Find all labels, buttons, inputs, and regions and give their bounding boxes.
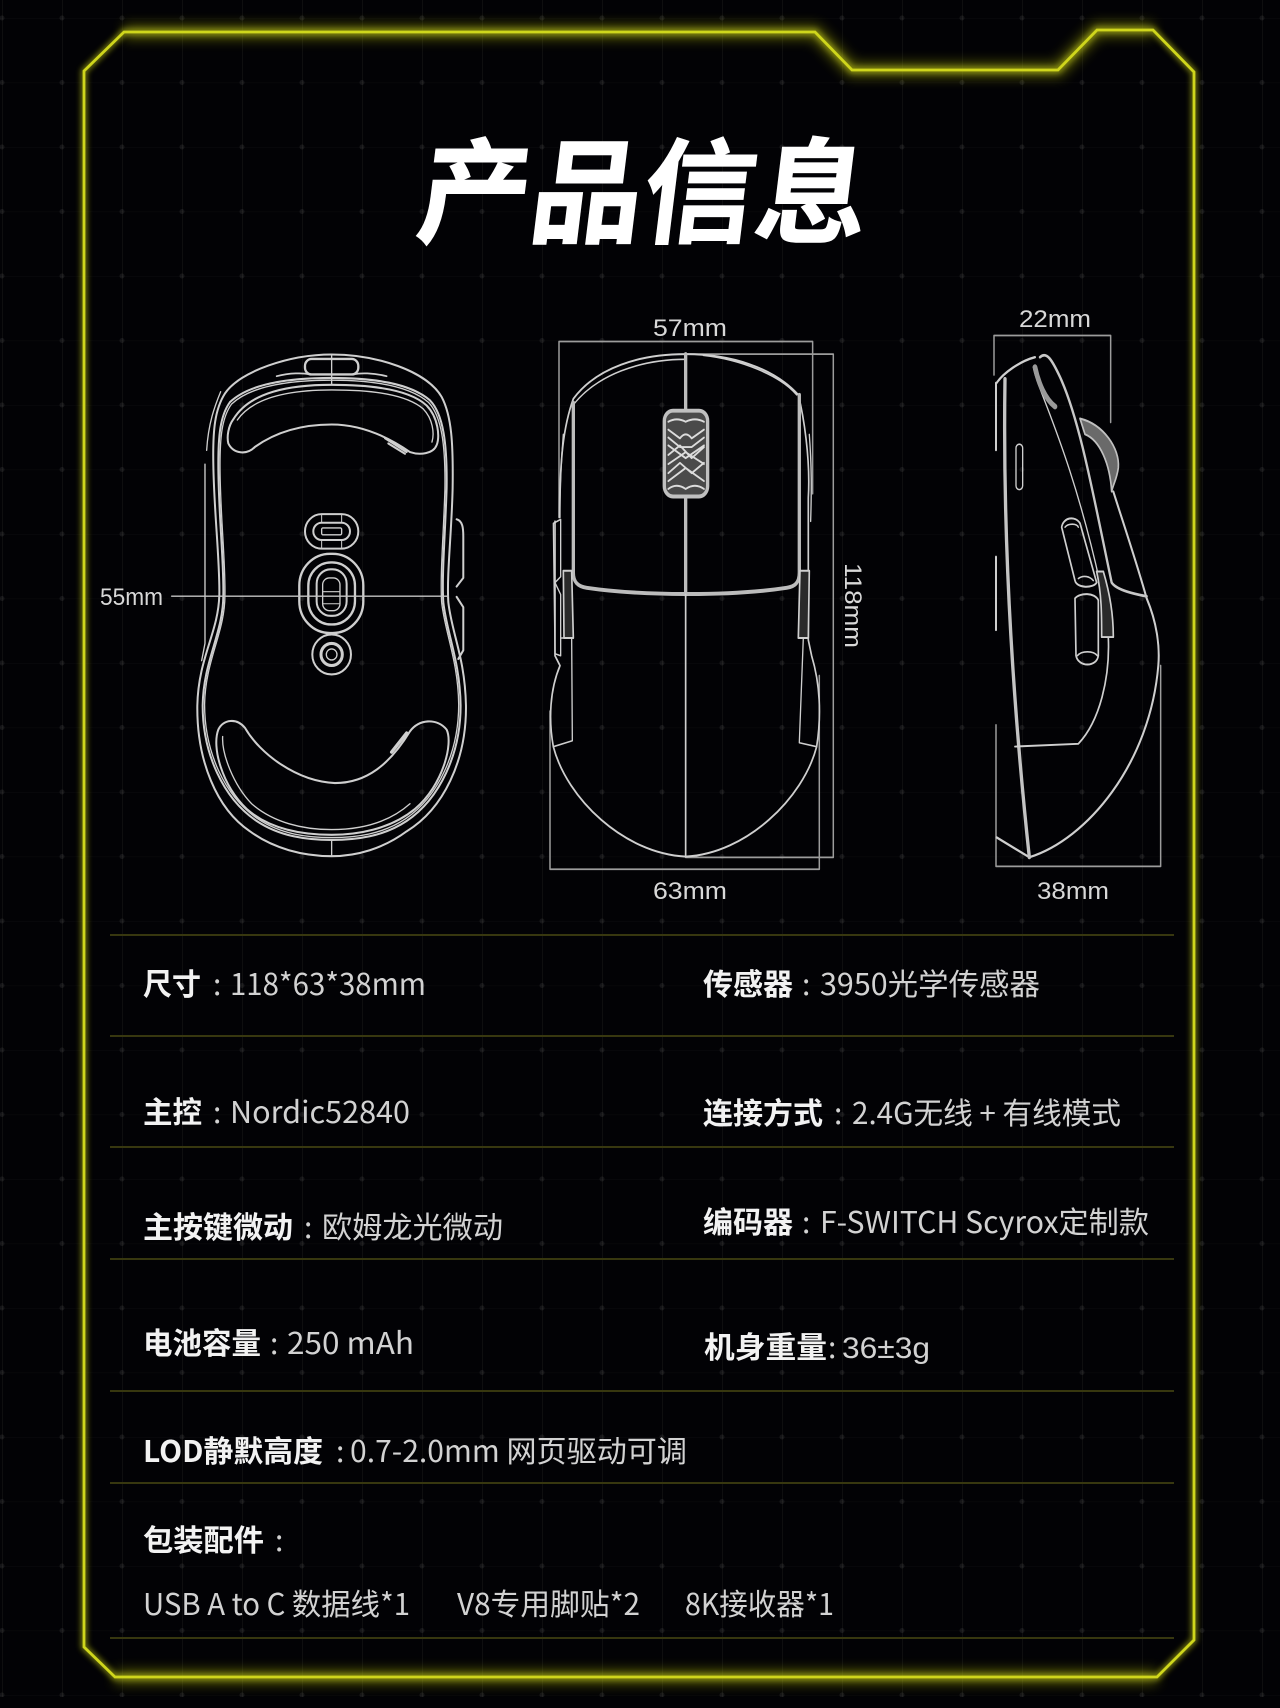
spec: package items: USB A to C 数据线*1 — [143, 1580, 410, 1624]
spec: weight: : — [828, 1323, 836, 1367]
label 55mm: 55mm — [100, 584, 163, 611]
centre seam — [681, 354, 691, 594]
spec: size — [143, 960, 426, 1004]
spec: LOD: 0.7-2.0mm 网页驱动可调 — [350, 1427, 687, 1471]
spec: weight — [704, 1323, 930, 1367]
top outline — [551, 354, 819, 857]
spec: size: : — [213, 960, 221, 1004]
spec dividers — [110, 935, 1174, 1638]
power switch — [305, 514, 358, 549]
lower wing line — [1015, 638, 1108, 747]
scroll wheel — [664, 411, 708, 496]
spec: controller: : — [213, 1088, 221, 1132]
label 38mm: 38mm — [1037, 878, 1109, 905]
spec: controller — [143, 1088, 410, 1132]
spec: package items: 8K接收器*1 — [685, 1580, 834, 1624]
spec: package items: V8专用脚贴*2 — [457, 1580, 640, 1624]
main button panel — [573, 395, 799, 594]
mouse top view — [550, 342, 833, 869]
spec: main switch: 欧姆龙光微动 — [322, 1203, 503, 1247]
spec: sensor: 传感器 — [703, 960, 793, 1004]
spec: connection: : — [834, 1089, 842, 1133]
spec: encoder: 编码器 — [703, 1198, 793, 1242]
label 22mm: 22mm — [1019, 306, 1091, 333]
bottom inner shell — [203, 378, 461, 840]
spec: battery: 电池容量 — [143, 1319, 261, 1363]
sensor window — [299, 554, 363, 633]
spec: weight: 机身重量 — [704, 1323, 827, 1367]
spec: controller: Nordic52840 — [230, 1088, 410, 1132]
spec: encoder: F-SWITCH Scyrox定制款 — [820, 1198, 1149, 1242]
spec: LOD: LOD静默高度 — [143, 1427, 323, 1471]
spec: encoder: : — [802, 1198, 810, 1242]
mouse side view — [994, 335, 1161, 866]
spec: connection — [703, 1089, 1121, 1133]
top highlight lines — [560, 355, 811, 521]
label 57mm: 57mm — [653, 315, 727, 342]
spec: sensor: : — [802, 960, 810, 1004]
side buttons — [457, 519, 463, 659]
spec: main switch: 主按键微动 — [143, 1203, 293, 1247]
spec: sensor: 3950光学传感器 — [820, 960, 1040, 1004]
spec: main switch: : — [304, 1203, 312, 1247]
spec: main switch — [143, 1203, 503, 1247]
scroll opening — [277, 354, 387, 385]
spec: size: 118*63*38mm — [230, 960, 426, 1004]
rear skate — [216, 721, 449, 835]
label 63mm: 63mm — [653, 878, 727, 905]
status light — [1016, 444, 1023, 490]
mouse bottom view — [172, 354, 466, 856]
label 118mm: 118mm — [839, 563, 866, 648]
scroll slot — [1035, 367, 1055, 407]
measure box — [994, 335, 1161, 866]
spec: battery: 250 mAh — [287, 1319, 414, 1363]
main button edge — [1040, 355, 1147, 596]
spec: connection: 连接方式 — [703, 1089, 823, 1133]
spec: size: 尺寸 — [143, 960, 201, 1004]
width measure line — [172, 594, 448, 598]
spec: LOD — [143, 1427, 687, 1471]
spec: battery: : — [270, 1319, 278, 1363]
side buttons — [1062, 518, 1113, 665]
bottom outer shell — [197, 354, 466, 856]
side buttons and panels — [553, 519, 817, 747]
spec: LOD: : — [336, 1427, 344, 1471]
side contour lines — [202, 392, 332, 856]
spec: package heading: 包装配件 — [143, 1516, 264, 1560]
measure box — [550, 342, 833, 869]
bottom shell highlight — [205, 380, 459, 838]
spec: controller: 主控 — [143, 1088, 202, 1132]
spec: sensor — [703, 960, 1040, 1004]
spec: package heading: : — [275, 1516, 283, 1560]
title: 产品信息 — [410, 101, 880, 267]
side outline — [996, 357, 1159, 857]
spec: connection: 2.4G无线 + 有线模式 — [852, 1089, 1121, 1133]
base edge — [1005, 379, 1029, 857]
spec: weight: 36±3g — [842, 1332, 930, 1365]
front skate — [228, 385, 438, 454]
scroll wheel — [1080, 418, 1118, 492]
mode button — [312, 634, 351, 674]
spec: battery — [143, 1319, 414, 1363]
spec: package items — [143, 1580, 834, 1624]
